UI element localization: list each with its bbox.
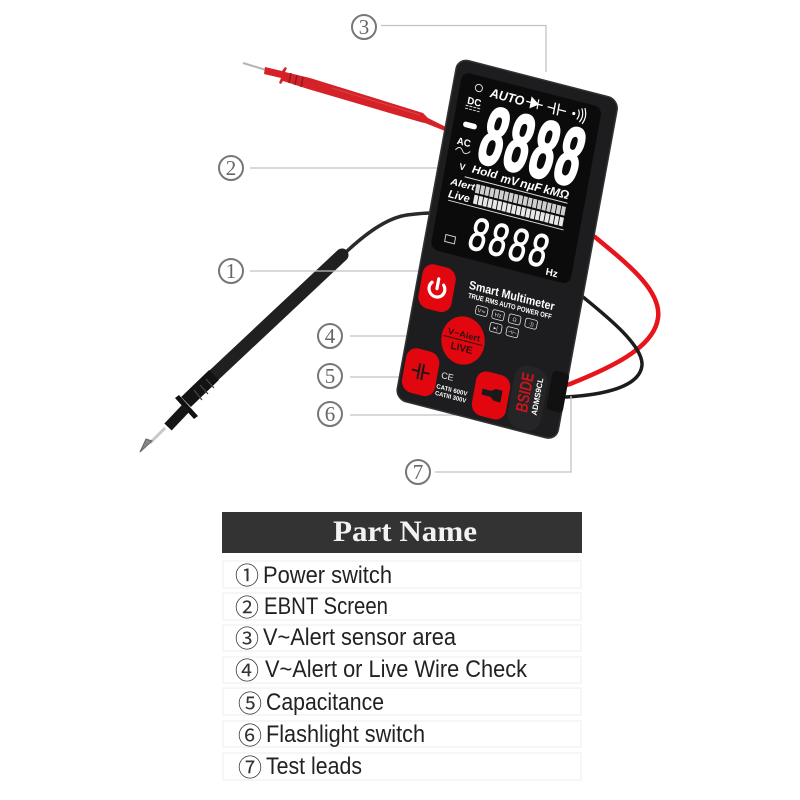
DC label: DC	[466, 96, 482, 110]
callout 3	[352, 15, 376, 39]
row 1: ①	[235, 556, 259, 591]
row 4: V~Alert or Live Wire Check	[265, 656, 528, 683]
black test lead: cable behind meter	[566, 297, 642, 397]
mode icons	[473, 305, 538, 342]
callout 5: 5	[325, 364, 335, 388]
brand pocket	[505, 363, 550, 434]
unit labels	[458, 160, 571, 202]
main digits	[470, 87, 595, 206]
mode icons: Ω	[512, 317, 517, 324]
row 5: Capacitance	[266, 689, 384, 716]
callout 2	[219, 156, 243, 180]
callout 4	[318, 324, 342, 348]
callout 1: 1	[226, 259, 236, 283]
V~Alert / LIVE button	[437, 312, 489, 370]
callout 7: 7	[413, 460, 423, 484]
unit labels: kMΩ	[542, 182, 571, 202]
feature line: TRUE RMS AUTO POWER OFF	[467, 291, 553, 321]
mode icons: V≂	[477, 308, 486, 316]
leader lines	[250, 26, 571, 472]
row 6: Flashlight switch	[266, 721, 425, 748]
black probe	[140, 213, 432, 452]
lower digits: 8	[463, 208, 495, 262]
lower digits: 8	[523, 223, 555, 277]
row 2	[235, 588, 388, 623]
unit labels: nµF	[519, 176, 544, 195]
minus sign	[463, 121, 477, 130]
row 3: ③	[235, 619, 259, 654]
main digits: 8	[495, 96, 544, 191]
callout 7	[406, 460, 430, 484]
row 3: V~Alert sensor area	[263, 624, 457, 651]
callout 6	[318, 402, 342, 426]
table: part name	[222, 512, 582, 783]
main digits: 8	[520, 102, 570, 197]
flashlight button	[470, 369, 512, 422]
callout 2: 2	[226, 156, 236, 180]
bar graph	[448, 174, 568, 230]
V~Alert / LIVE button: V~Alert	[447, 326, 481, 344]
main digits: 8	[470, 89, 519, 184]
product name: Smart Multimeter	[468, 278, 556, 314]
meter body	[395, 58, 619, 441]
Alert and Live labels: Live	[447, 188, 471, 205]
row 6: ⑥	[238, 716, 262, 751]
red probe	[243, 63, 446, 131]
Alert and Live labels	[446, 176, 477, 206]
status icons row	[474, 80, 587, 124]
main digits: 8	[545, 109, 595, 204]
row backgrounds	[223, 561, 581, 780]
row 6	[238, 716, 425, 751]
mode icons: ·))	[528, 321, 534, 328]
lower digits	[463, 206, 555, 279]
LCD screen	[430, 72, 602, 285]
lead connector	[546, 370, 570, 413]
mode icons: Hz	[494, 312, 502, 320]
row 1	[235, 556, 392, 591]
table heading	[222, 512, 582, 553]
callout 1	[219, 259, 243, 283]
callout 3: 3	[359, 15, 369, 39]
row 5: ⑤	[238, 684, 262, 719]
red test lead: cable behind meter	[566, 237, 658, 385]
CE and category ratings: CATII 600V	[436, 383, 469, 398]
BSIDE brand: BSIDE	[512, 370, 538, 414]
unit labels: mV	[500, 171, 521, 189]
CE and category ratings: CATIII 300V	[434, 390, 467, 405]
row 4	[235, 651, 528, 686]
CE and category ratings: CE	[441, 370, 454, 383]
callout 4: 4	[325, 324, 336, 348]
row 1: Power switch	[263, 562, 392, 589]
callout 6: 6	[325, 402, 335, 426]
model number: ADMS9CL	[530, 377, 545, 416]
callout 5	[318, 364, 342, 388]
AC label: AC	[456, 136, 471, 150]
unit labels: Hold	[471, 164, 499, 182]
row 7: Test leads	[266, 753, 362, 780]
Alert and Live labels: Alert	[448, 176, 477, 194]
row 2: EBNT Screen	[264, 593, 388, 620]
mode icons: ⊣⊢	[507, 329, 517, 337]
Hz label: Hz	[545, 267, 559, 280]
lower digits: 8	[483, 213, 515, 267]
row 4: ④	[235, 651, 259, 686]
V~Alert / LIVE button: LIVE	[450, 341, 474, 357]
capacitance button	[400, 346, 441, 398]
row 5	[238, 684, 384, 719]
row 3	[235, 619, 457, 654]
lower digits: 8	[503, 218, 535, 272]
battery icon	[445, 234, 456, 244]
row 2: ②	[235, 588, 259, 623]
unit labels: V	[459, 161, 466, 173]
row 7	[238, 748, 362, 783]
power button	[417, 262, 458, 314]
mode icons: ▸|	[493, 325, 498, 332]
CE and category ratings	[434, 369, 471, 405]
table heading: Part Name	[333, 515, 477, 548]
status icons row: AUTO	[488, 85, 526, 109]
multimeter	[395, 58, 620, 441]
row 7: ⑦	[238, 748, 262, 783]
